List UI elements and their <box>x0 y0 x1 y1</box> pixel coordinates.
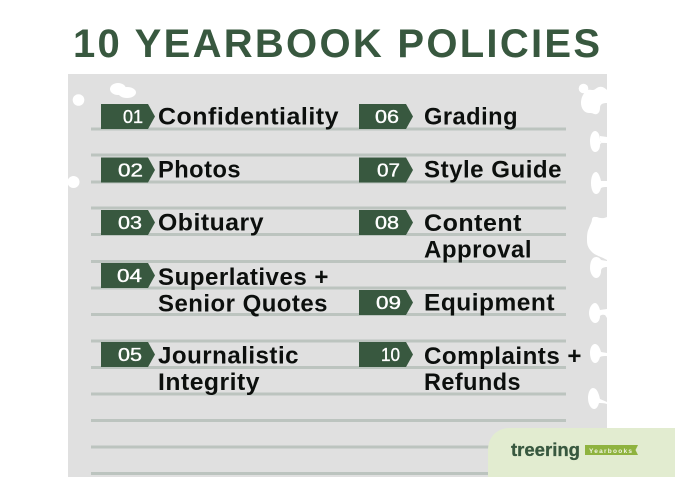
policy 02 <box>101 156 241 184</box>
policy 04 <box>101 263 329 318</box>
policy 08: 08 <box>375 213 399 233</box>
policy 04: Superlatives + <box>158 264 329 291</box>
policy 05: Integrity <box>158 369 260 396</box>
policy 08: Approval <box>424 236 532 264</box>
logo panel <box>488 428 675 477</box>
policy 07 <box>359 156 562 184</box>
policy 04: Senior Quotes <box>158 290 328 318</box>
policy 05: 05 <box>118 345 142 365</box>
policy 05 <box>101 342 299 396</box>
panel: torn notebook paper <box>68 74 607 477</box>
policy 03: 03 <box>118 213 142 233</box>
policy 01: Confidentiality <box>158 104 339 130</box>
yearbooks ribbon: Yearbooks <box>589 448 632 455</box>
notebook ruled lines <box>91 128 566 475</box>
policy 08 <box>359 210 532 264</box>
policy 03 <box>101 210 264 236</box>
policy 10: Refunds <box>424 369 521 396</box>
yearbooks ribbon <box>585 445 638 455</box>
treering wordmark: treering <box>511 439 580 460</box>
policy 10: Complaints + <box>424 343 582 370</box>
policy 03: Obituary <box>158 210 264 236</box>
policy 07: 07 <box>377 160 400 180</box>
policy 02: 02 <box>118 160 143 180</box>
policy 09 <box>359 290 555 316</box>
policy 06 <box>359 104 518 130</box>
policy 01: 01 <box>123 107 143 127</box>
policy 09: Equipment <box>424 290 555 316</box>
policy 05: Journalistic <box>158 342 299 370</box>
policy 10: 10 <box>381 345 400 365</box>
policy 02: Photos <box>158 156 241 184</box>
policy 04: 04 <box>117 266 142 286</box>
title: 10 YEARBOOK POLICIES <box>73 22 600 66</box>
policy 06: 06 <box>375 107 399 127</box>
policy 09: 09 <box>376 293 401 313</box>
policy 07: Style Guide <box>424 156 562 184</box>
policy 08: Content <box>424 210 522 237</box>
policy 10 <box>359 342 582 396</box>
policy 06: Grading <box>424 104 518 130</box>
